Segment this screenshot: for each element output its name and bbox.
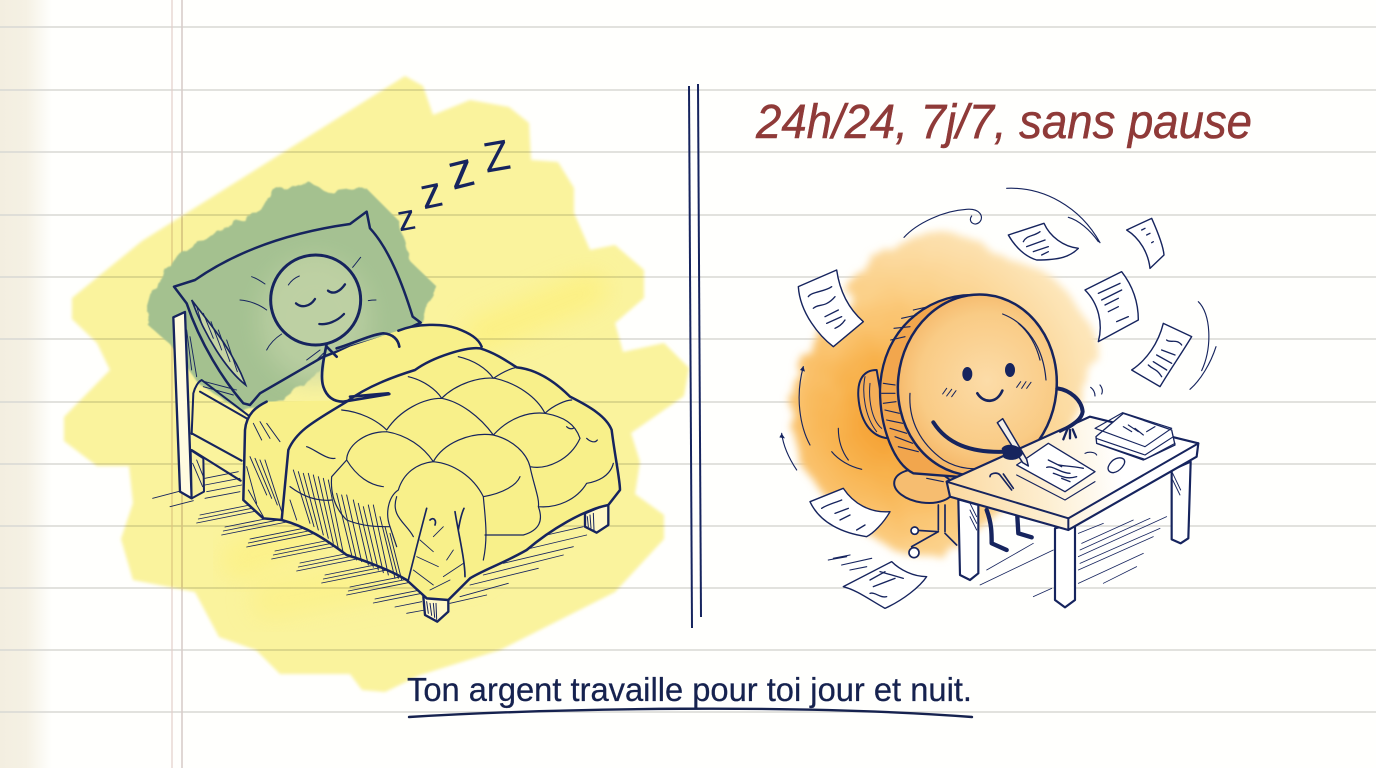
snoring letters z: Z bbox=[480, 131, 514, 183]
panel: sleeping person in bed bbox=[64, 76, 689, 692]
motion lines bbox=[782, 188, 1216, 570]
divider: double vertical line bbox=[689, 84, 701, 628]
right arm bbox=[1057, 388, 1083, 428]
caption: Ton argent travaille pour toi jour et nuit: Ton argent travaille pour toi jour et nuit. bbox=[407, 671, 972, 708]
chair bbox=[858, 370, 957, 558]
paper scribbles bbox=[808, 228, 1182, 597]
pillow bbox=[174, 212, 421, 405]
blanket bbox=[243, 325, 620, 600]
desk top bbox=[947, 417, 1198, 530]
illustration: bed and stick figure bbox=[153, 131, 620, 622]
floor hatching bbox=[980, 517, 1167, 597]
snoring letters z: z bbox=[416, 168, 447, 219]
stick figure head bbox=[271, 255, 361, 345]
yellow watercolor brush wash bbox=[64, 76, 689, 692]
face eyes and smile bbox=[962, 367, 972, 381]
desk legs bbox=[958, 499, 978, 580]
floor hatching bbox=[153, 472, 587, 613]
snoring letters z: z bbox=[442, 140, 480, 201]
coin face bbox=[889, 287, 1066, 483]
illustration: coin character bbox=[779, 188, 1216, 608]
orange watercolor glow bbox=[790, 232, 1099, 557]
arm and body of stick figure bbox=[322, 333, 399, 402]
flying papers bbox=[798, 218, 1192, 608]
stack of paper on desk bbox=[1096, 413, 1175, 460]
pale center of green wash bbox=[260, 258, 370, 382]
coin body bbox=[880, 295, 1057, 477]
quilt seams bbox=[290, 357, 613, 560]
panel: coin working at desk bbox=[779, 188, 1216, 608]
coin legs bbox=[987, 510, 1032, 550]
snoring letters z bbox=[394, 131, 514, 239]
snoring letters z: z bbox=[394, 196, 419, 239]
blanket corner fold bbox=[408, 508, 465, 580]
desk sheet and pencil bbox=[1017, 443, 1095, 492]
blanket shading hatch bbox=[247, 422, 402, 580]
feet of bed bbox=[423, 597, 448, 622]
left arm and pen bbox=[933, 422, 1007, 452]
bed frame bbox=[173, 312, 192, 498]
heading: 24h/24, 7j/7, sans pause: 24h/24, 7j/7, sans pause bbox=[755, 96, 1252, 149]
green watercolor behind pillow bbox=[146, 182, 436, 413]
